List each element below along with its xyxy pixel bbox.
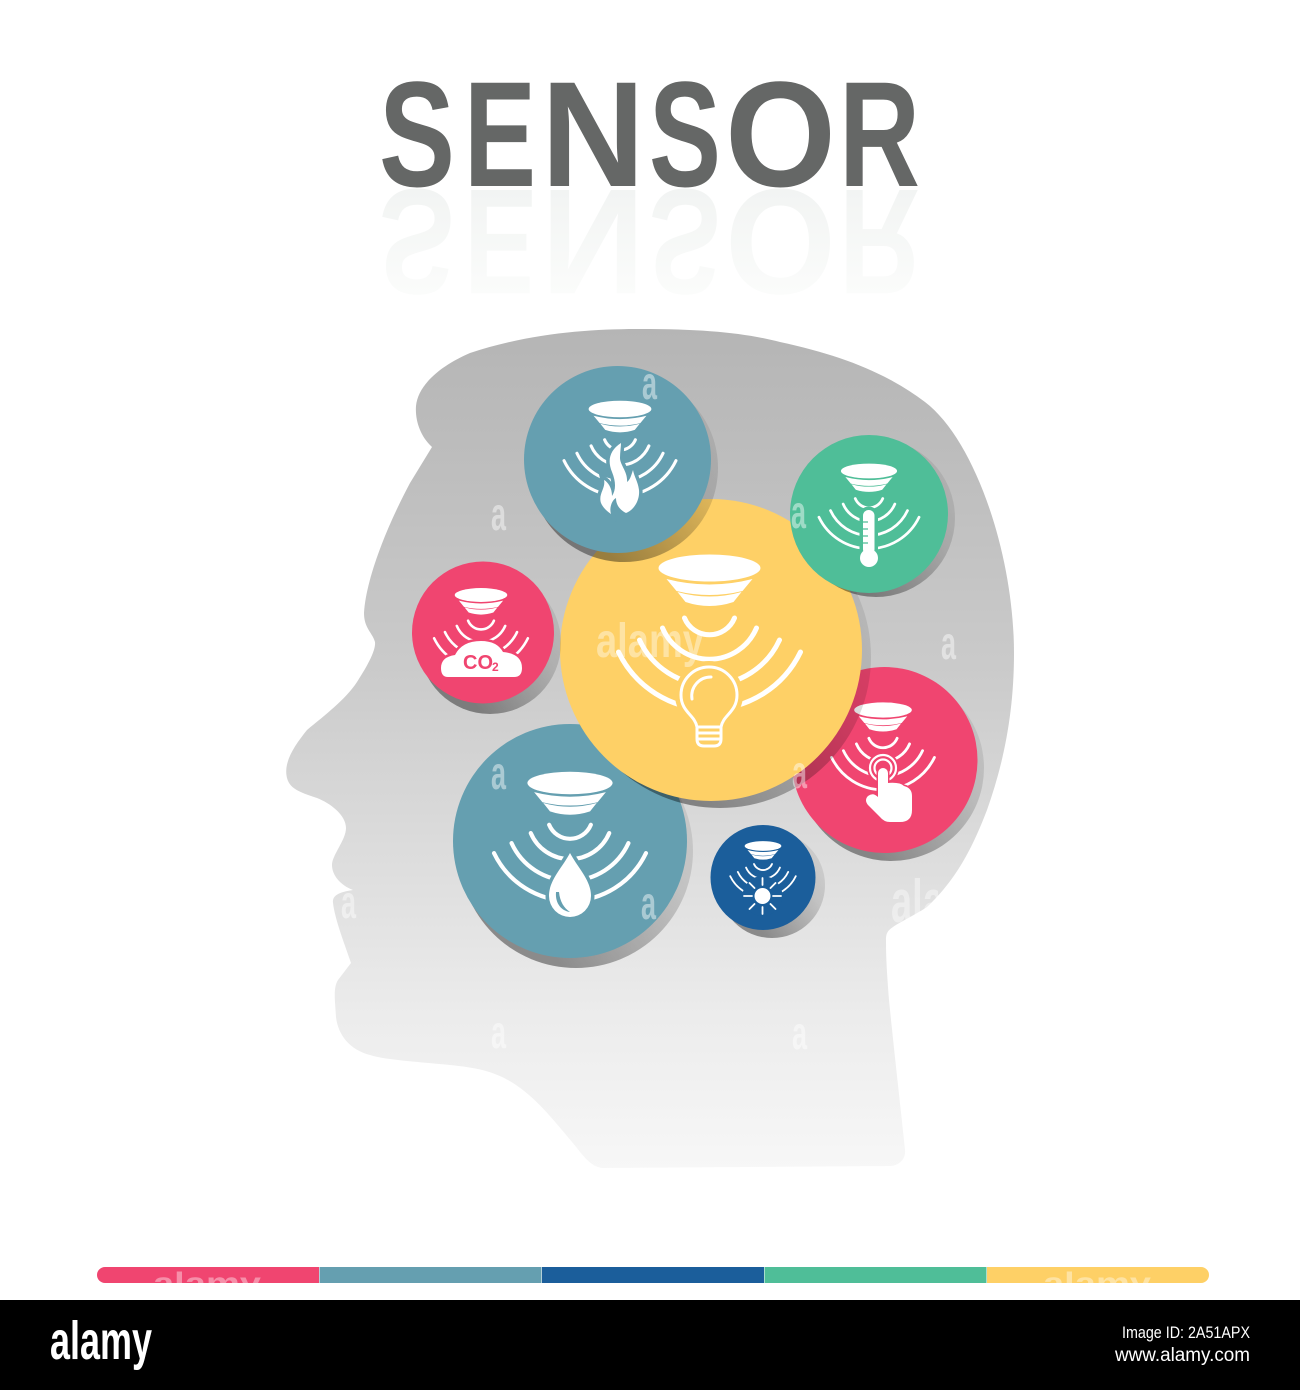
sensor waves [494, 772, 646, 901]
circle disc [790, 435, 948, 593]
icon: touch hand [866, 752, 912, 822]
sensor waves [434, 588, 528, 668]
watermark: alamy on yellow circle: alamy [596, 615, 704, 668]
sensor waves [819, 464, 919, 549]
watermark letters: a [791, 486, 806, 538]
icon: water drop [549, 853, 591, 917]
bar segment: blue [542, 1267, 764, 1283]
watermark on bar: alamy [153, 1267, 261, 1300]
circle shadow [719, 832, 825, 938]
title: SENSOR: S [379, 50, 455, 218]
sensor waves [564, 401, 676, 496]
watermark letters [341, 357, 956, 1059]
circle: light sensor [560, 499, 871, 808]
sensor waves [618, 554, 800, 709]
title reflection: E [464, 158, 536, 326]
bar segment: pink [97, 1267, 319, 1283]
title: SENSOR: E [464, 50, 536, 218]
head silhouette [286, 329, 1014, 1168]
title reflection: O [725, 158, 836, 326]
legend colour bar [97, 1267, 1209, 1283]
watermark: alamy on neck: alamy [891, 868, 999, 935]
bar segment: teal [320, 1267, 542, 1283]
watermark letters: a [491, 1006, 506, 1058]
title reflection: S [379, 158, 455, 326]
circle shadow [419, 572, 561, 714]
circle: sun sensor [710, 825, 825, 938]
watermark letters: a [642, 357, 657, 409]
icon: sun [742, 876, 782, 916]
circle disc [792, 667, 978, 853]
watermark letters: a [941, 617, 956, 669]
title: SENSOR: N [541, 50, 645, 218]
circle disc [524, 366, 711, 553]
footer band [0, 1300, 1300, 1390]
circle: touch sensor [792, 667, 984, 861]
watermark letters: a [792, 746, 807, 798]
footer logo: alamy [50, 1311, 152, 1371]
title: SENSOR: O [725, 50, 836, 218]
circle shadow [569, 506, 871, 808]
sensor waves [832, 702, 934, 790]
icon: light bulb [681, 667, 737, 746]
watermark on bar: alamy [1043, 1267, 1151, 1300]
circle: CO2 sensor [412, 562, 561, 714]
watermark on bar [155, 1272, 1151, 1283]
title reflection: R [839, 158, 920, 326]
circle disc [453, 724, 687, 958]
bar segment: green [764, 1267, 986, 1283]
circle shadow [797, 439, 955, 597]
circle shadow [459, 734, 693, 968]
title reflection: S [649, 158, 721, 326]
sensor waves [730, 841, 796, 897]
watermark letters: a [792, 1007, 807, 1059]
icon: CO2 cloud: 2 [492, 660, 499, 674]
icon: CO2 cloud [441, 641, 522, 677]
watermark letters: a [491, 747, 506, 799]
circle shadow [530, 374, 718, 562]
circle disc [560, 499, 862, 801]
icon: thermometer [860, 510, 878, 567]
circle disc [412, 562, 554, 704]
title reflection: N [541, 158, 645, 326]
icon: flame [600, 443, 639, 514]
watermark letters: a [341, 876, 356, 928]
watermark letters: a [641, 877, 656, 929]
watermark letters: a [491, 488, 506, 540]
bar segment: yellow [987, 1267, 1209, 1283]
circle: flame sensor [524, 366, 718, 562]
circle: humidity sensor [453, 724, 693, 968]
image id: Image ID: 2A51APX [1122, 1323, 1250, 1342]
title: SENSOR: R [839, 50, 920, 218]
circle: temperature sensor [790, 435, 955, 597]
title: SENSOR: S [649, 50, 721, 218]
circle disc [710, 825, 816, 930]
footer url: www.alamy.com [1114, 1345, 1250, 1366]
icon: CO2 cloud: CO [463, 652, 493, 674]
circle shadow [798, 675, 984, 861]
